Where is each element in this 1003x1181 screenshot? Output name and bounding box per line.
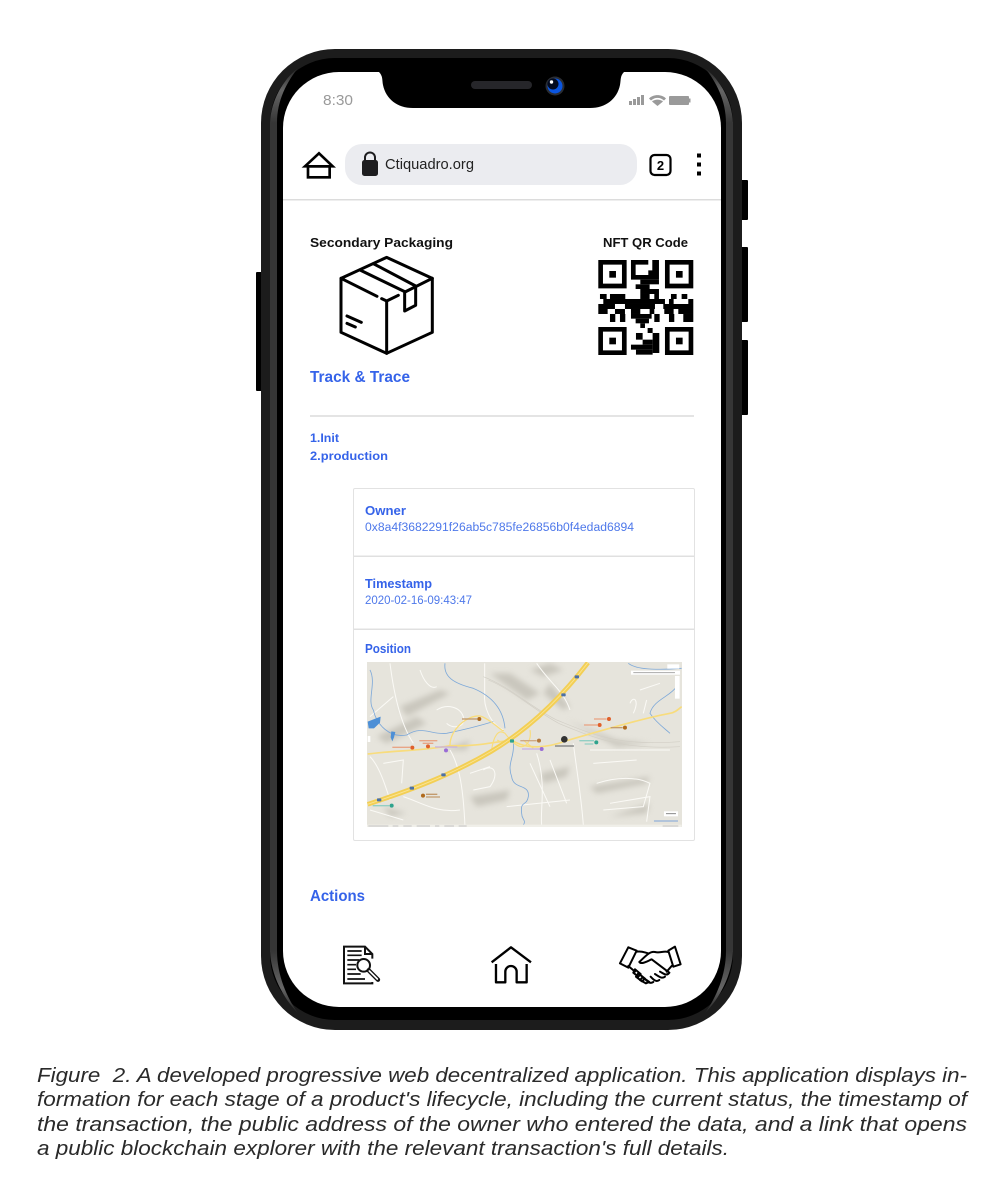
lakes	[368, 717, 381, 728]
highway shields	[377, 675, 579, 801]
url text: Ctiquadro.org	[385, 156, 474, 173]
timestamp: 2020-02-16-09:43:47	[365, 595, 472, 607]
map controls	[367, 664, 682, 828]
heading: secondary packaging: Secondary Packaging	[310, 235, 453, 250]
stage list: 2.production	[310, 449, 388, 463]
owner: 0x8a4f3682291f26ab5c785fe26856b0f4edad6894	[365, 522, 635, 534]
heading: track and trace: Track & Trace	[310, 369, 410, 386]
tab counter: 2	[657, 158, 664, 173]
address bar	[345, 144, 637, 185]
owner	[365, 504, 635, 534]
panel: transaction details	[354, 488, 694, 840]
caption	[37, 1065, 970, 1160]
rivers	[370, 663, 682, 825]
browser home icon	[305, 153, 333, 177]
interstate	[368, 663, 588, 804]
caption: Figure 2. A developed progressive web decentralized application. This application displays in-	[37, 1065, 967, 1087]
stage list: 1.Init	[310, 431, 339, 445]
minor roads	[370, 663, 670, 827]
tab counter	[650, 155, 670, 175]
timestamp	[365, 577, 472, 607]
icon: lock	[362, 152, 378, 176]
map	[367, 662, 682, 828]
caption: a public blockchain explorer with the relevant transaction's full details.	[37, 1138, 729, 1160]
side buttons	[256, 180, 748, 415]
menu dots	[697, 154, 701, 176]
heading: actions: Actions	[310, 888, 365, 905]
qr code	[598, 260, 693, 355]
ramps and state road	[368, 707, 682, 754]
icon: home	[492, 947, 531, 982]
stage list	[310, 431, 388, 463]
phone body	[256, 49, 748, 1030]
notch with speaker and camera	[379, 72, 624, 108]
caption: the transaction, the public address of the owner who entered the data, and a link that opens	[37, 1114, 967, 1136]
status time: 8:30	[323, 92, 353, 109]
icon: document search	[344, 947, 378, 983]
heading: nft qr code: NFT QR Code	[603, 235, 688, 250]
icon: cardboard box	[341, 257, 432, 353]
status icons	[629, 95, 690, 106]
owner: Owner	[365, 504, 406, 518]
place markers	[373, 717, 627, 808]
icon: handshake	[620, 947, 681, 983]
timestamp: Timestamp	[365, 577, 432, 591]
caption: formation for each stage of a product's lifecycle, including the current status, the timestamp of	[37, 1089, 970, 1111]
position label: Position	[365, 642, 411, 656]
